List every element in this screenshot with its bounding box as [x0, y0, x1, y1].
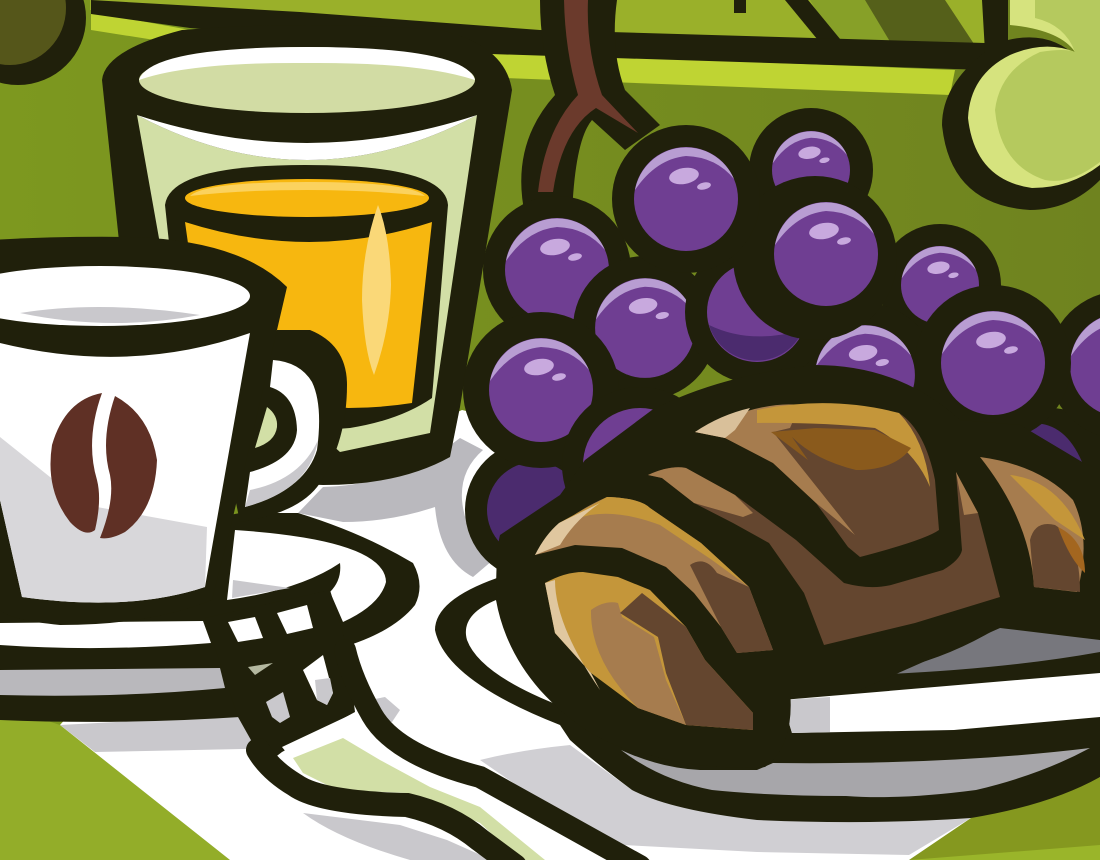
croissant: [496, 365, 1100, 768]
cup handle: [225, 330, 347, 522]
grape: [733, 176, 897, 340]
grape: [562, 387, 718, 543]
juice glass: [165, 165, 448, 440]
grape: [793, 303, 937, 447]
top panel: [90, 0, 985, 50]
fork: [205, 590, 640, 860]
top dark bar: [91, 0, 985, 70]
croissant outline: [496, 365, 1100, 768]
right lobe: [980, 457, 1085, 592]
grape: [685, 240, 829, 384]
fork head: [205, 590, 355, 765]
grape: [879, 224, 1001, 346]
grape: [915, 285, 1071, 441]
grape: [749, 108, 873, 232]
saucer: [0, 513, 420, 722]
fork handle fill: [282, 715, 630, 860]
grape: [980, 408, 1100, 548]
grape: [483, 196, 631, 344]
grape: [1048, 291, 1100, 439]
grape bunch: [463, 108, 1100, 580]
grape stem: [521, 0, 660, 215]
tablecloth: [60, 410, 1100, 860]
fork handle outline: [345, 650, 640, 860]
glass highlight: [362, 205, 391, 375]
left lobe: [535, 497, 773, 653]
grape: [465, 440, 605, 580]
top lobe: [695, 403, 939, 557]
grape: [463, 312, 619, 468]
lime stripe: [91, 12, 955, 95]
icon: pale green grape top right: [942, 0, 1100, 210]
grape: [612, 125, 760, 273]
icon: top-left olive fruit: [0, 0, 86, 85]
plate: [435, 578, 1100, 822]
icon: coffee bean: [50, 393, 157, 538]
coffee cup: [0, 237, 347, 625]
tall glass: [102, 25, 512, 485]
grape: [573, 256, 717, 400]
middle lobe: [648, 467, 1000, 645]
tip lobe: [545, 572, 753, 730]
